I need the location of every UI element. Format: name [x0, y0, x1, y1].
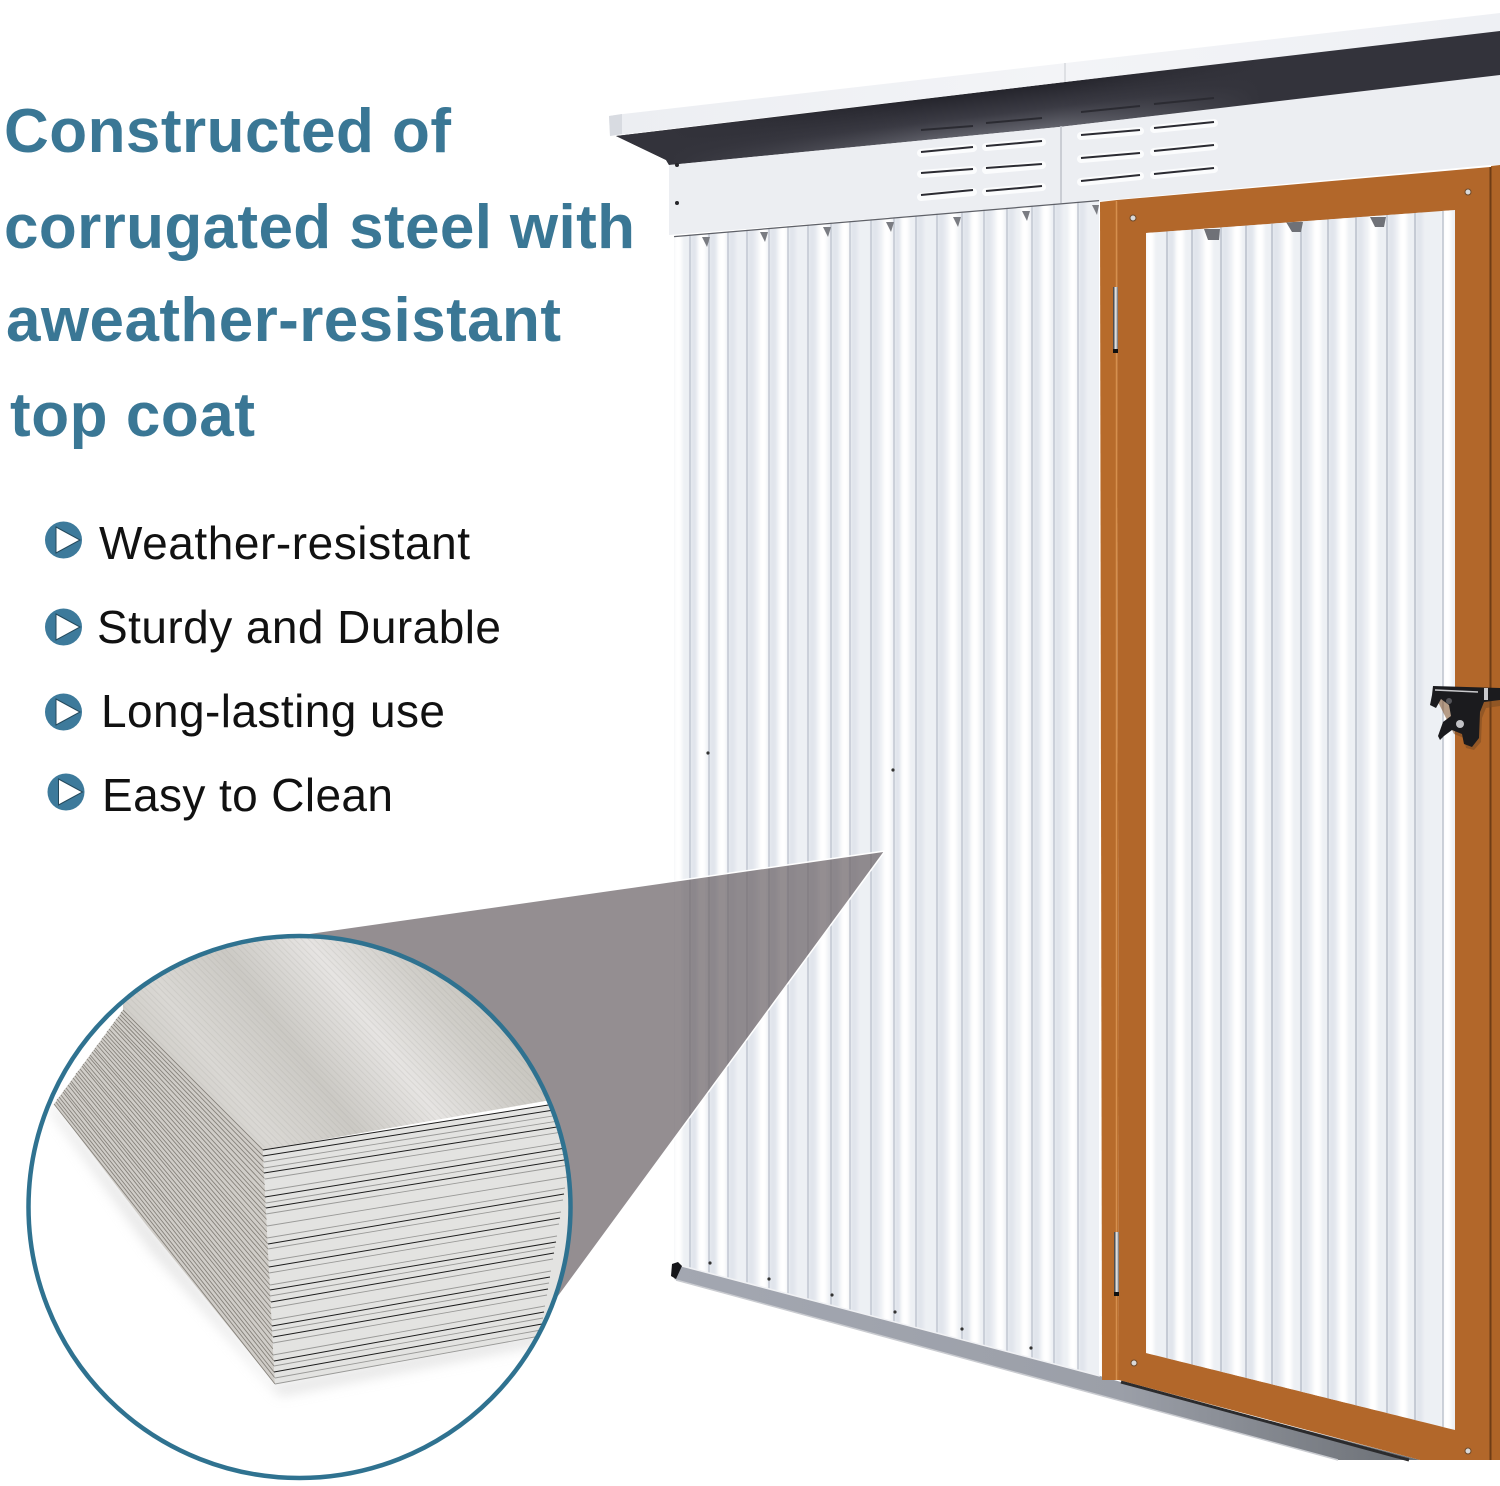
shed illustration: [609, 13, 1500, 1460]
callout projection wedge: [290, 851, 885, 1304]
left stack edge: [54, 1010, 275, 1384]
base angle strip: [671, 1262, 1420, 1460]
door latch: [1430, 686, 1500, 750]
roof top panel: [609, 13, 1500, 136]
title: Constructed of: [4, 97, 451, 166]
zoom circle: stacked steel sheets: [28, 900, 580, 1478]
door corrugated panel: [1146, 205, 1456, 1435]
door frame: [1116, 165, 1500, 1460]
circle outline: [28, 936, 570, 1478]
hinge: upper: [1113, 287, 1118, 353]
bullet: long-lasting use: Long-lasting use: [101, 685, 445, 737]
door post: [1100, 200, 1119, 1380]
title: corrugated steel with: [4, 193, 635, 262]
bullet: sturdy and durable: Sturdy and Durable: [97, 601, 501, 653]
title: [4, 97, 635, 450]
hinge: lower: [1114, 1232, 1119, 1296]
circle background: [28, 936, 570, 1478]
right stack edge: [263, 1100, 580, 1384]
brushed top sheet: [123, 938, 546, 1150]
sheet stack: [50, 900, 580, 1396]
bullet: weather-resistant: Weather-resistant: [99, 517, 470, 569]
stack shadow: [50, 1104, 540, 1396]
corrugated wall panel: [674, 195, 1100, 1390]
feature list: [45, 517, 501, 821]
bullet: easy to clean: Easy to Clean: [102, 769, 393, 821]
fascia with vents: [669, 75, 1500, 235]
roof underside shadow: [616, 30, 1500, 165]
title: top coat: [10, 381, 255, 450]
title: aweather-resistant: [6, 286, 561, 355]
